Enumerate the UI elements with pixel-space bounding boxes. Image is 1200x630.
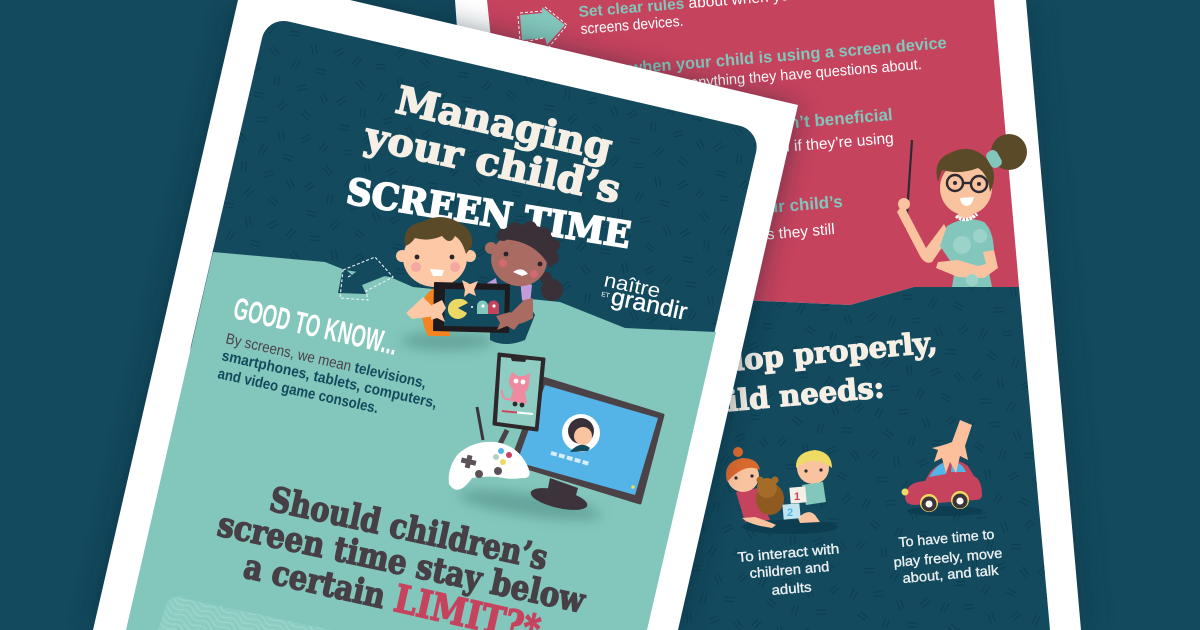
text: free play: about, and talk xyxy=(902,563,999,586)
panel: navy header xyxy=(186,17,761,481)
illustration: monitor, phone and game controller xyxy=(449,354,663,526)
text: interact with children: adults xyxy=(771,580,812,598)
title: your child’s xyxy=(360,113,625,212)
back page shadow xyxy=(455,0,1088,630)
heading: what children need xyxy=(604,325,939,429)
panel: navy section xyxy=(520,287,1050,630)
tablet xyxy=(434,283,509,332)
heading: what children need: develop properly, xyxy=(658,325,939,384)
tip 3: isn’t beneficial xyxy=(774,105,893,133)
logo: naitre et grandir: naître xyxy=(602,269,662,303)
text: definition of screens: By screens, we mean televisions, xyxy=(224,330,428,392)
tip 4: as they still xyxy=(758,221,835,244)
panel: textured callout box xyxy=(158,597,330,630)
tip 1 xyxy=(578,0,898,38)
front page shadow xyxy=(93,0,798,630)
tip 2: when your child is using a screen device xyxy=(628,34,947,78)
game controller xyxy=(449,407,530,490)
panel: rose section xyxy=(487,0,1019,320)
text: definition of screens: and video game consoles. xyxy=(216,365,380,417)
panel: teal section xyxy=(126,252,716,630)
phone xyxy=(494,354,544,430)
tip 4: your child’s xyxy=(747,192,843,219)
logo: naitre et grandir xyxy=(601,269,690,326)
logo: naitre et grandir: grandir xyxy=(609,283,690,326)
tip 4 xyxy=(747,192,843,244)
text: interact with children: children and xyxy=(749,559,830,581)
icon: teal arrow xyxy=(518,7,567,47)
heading: what children need: your child needs: xyxy=(604,370,886,429)
logo: naitre et grandir: ET xyxy=(601,291,610,300)
back page xyxy=(455,0,1088,630)
text: free play: play freely, move xyxy=(893,546,1003,570)
tip 2: anything they have questions about. xyxy=(690,56,922,92)
text: interact with children xyxy=(737,541,840,598)
heading: should children's screen time stay below a certain limit: Should children’s xyxy=(266,480,551,579)
title xyxy=(344,77,634,257)
ground shadow xyxy=(401,332,493,350)
tip 3 xyxy=(756,105,894,158)
text: definition of screens: smartphones, tablets, computers, xyxy=(220,347,439,412)
front page xyxy=(93,0,798,630)
illustration: two children with tablet xyxy=(396,217,563,350)
title: SCREEN TIME xyxy=(344,170,634,257)
illustration: children playing with toys xyxy=(726,447,838,534)
illustration: hand pushing toy car xyxy=(902,420,983,516)
illustration: children playing with toys: 1 xyxy=(794,491,800,503)
tip 1: screens devices. xyxy=(580,13,684,38)
back page white sheet xyxy=(455,0,1081,630)
text: interact with children: To interact with xyxy=(737,541,840,565)
icon: navy dashed arrow xyxy=(338,257,393,300)
girl xyxy=(484,221,563,344)
text: free play: To have time to xyxy=(898,527,995,550)
illustration: children playing with toys: 2 xyxy=(787,507,793,519)
monitor xyxy=(511,378,663,514)
heading: good to know: GOOD TO KNOW... xyxy=(230,291,401,362)
tip 3: even if they’re using xyxy=(756,130,894,158)
hands on tablet xyxy=(431,280,522,330)
front page white sheet xyxy=(93,0,798,630)
illustration: teacher with pointer xyxy=(897,134,1027,287)
title: Managing xyxy=(392,77,616,170)
boy xyxy=(396,217,476,336)
text: free play xyxy=(893,527,1003,586)
ground shadow xyxy=(457,484,603,526)
